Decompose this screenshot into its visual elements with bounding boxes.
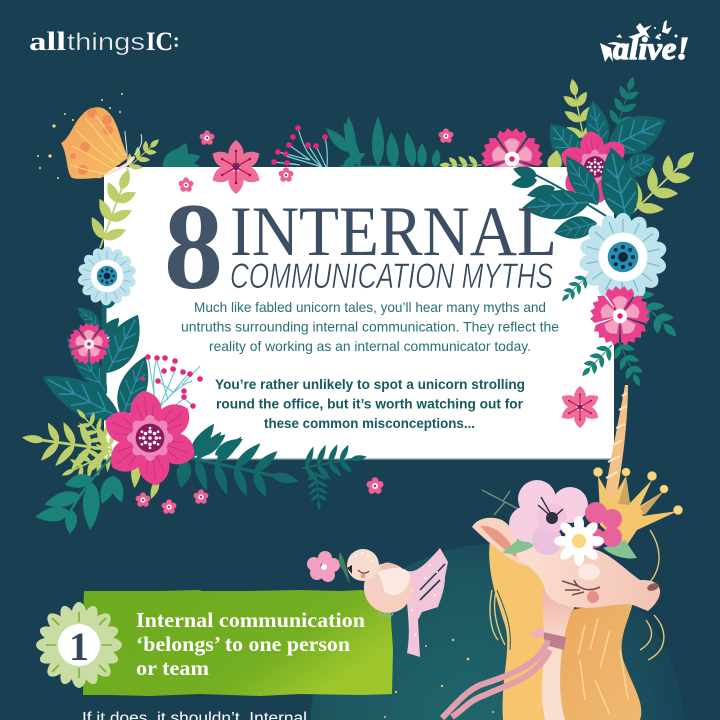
fern fronds bbox=[322, 116, 442, 170]
logo: alive: alive! bbox=[613, 30, 689, 66]
flower: carnation left bbox=[66, 323, 112, 367]
head flowers bbox=[509, 480, 622, 566]
pink wing ribbon bbox=[405, 548, 448, 657]
ear bbox=[472, 518, 526, 566]
title bbox=[164, 178, 557, 315]
unicorn bbox=[384, 385, 682, 720]
teal sprig left bbox=[34, 450, 127, 534]
intro text: Much like fabled unicorn tales, you’ll hear many myths and bbox=[194, 299, 546, 315]
subtitle: COMMUNICATION MYTHS bbox=[230, 257, 553, 296]
intro bold text: these common misconceptions... bbox=[264, 415, 475, 431]
hair left bbox=[489, 540, 570, 720]
banner heading: ‘belongs’ to one person bbox=[136, 632, 350, 656]
flower: big pink left bbox=[100, 389, 200, 487]
lime stem left over panel edge bbox=[80, 131, 167, 255]
logo: allthingsIC: things bbox=[67, 29, 145, 56]
leaves under flowers bbox=[502, 538, 637, 559]
dark fern lower bbox=[184, 424, 306, 511]
flower: blue right bbox=[578, 213, 668, 301]
berry branch left bbox=[141, 354, 203, 412]
crown bbox=[598, 476, 678, 548]
eye bbox=[562, 580, 600, 595]
badge: number 1: 1 bbox=[69, 624, 89, 669]
flower: carnation right bbox=[587, 286, 653, 349]
lime fern left bbox=[18, 399, 161, 500]
sparkles bbox=[384, 639, 494, 718]
collar bbox=[543, 632, 566, 650]
mane right bbox=[560, 598, 641, 720]
logo: alive bbox=[600, 20, 689, 66]
logo: allthingsIC: IC bbox=[146, 27, 173, 56]
word INTERNAL: INTERNAL bbox=[230, 193, 557, 271]
left cluster foliage bbox=[18, 276, 370, 534]
front leaves bbox=[520, 168, 606, 216]
intro bold text bbox=[215, 376, 525, 431]
lime sprig top bbox=[439, 154, 482, 176]
logo: allthingsIC: : bbox=[173, 30, 180, 52]
banner: myth 1 bbox=[83, 590, 393, 696]
oak leaf sprig bbox=[158, 140, 203, 173]
butterfly bbox=[37, 93, 142, 179]
banner heading: Internal communication bbox=[136, 608, 365, 632]
logo: allthingsIC: all bbox=[29, 27, 66, 56]
neck bbox=[542, 590, 590, 720]
small flowers on panel and around bbox=[136, 128, 453, 514]
head bbox=[516, 540, 660, 611]
intro text: reality of working as an internal communicator today. bbox=[209, 338, 531, 354]
banner heading bbox=[136, 608, 365, 680]
intro text: untruths surrounding internal communication. They reflect the bbox=[181, 318, 559, 334]
intro bold text: You’re rather unlikely to spot a unicorn strolling bbox=[215, 376, 525, 392]
carnation flower top bbox=[478, 128, 546, 193]
nose bbox=[646, 582, 660, 592]
lower teal sprigs bbox=[618, 278, 688, 348]
flower held by bird bbox=[307, 551, 340, 582]
top foliage behind panel bbox=[158, 72, 710, 232]
banner heading: or team bbox=[136, 656, 210, 680]
intro bold text: round the office, but it’s worth watching out for bbox=[216, 396, 524, 412]
number 8: 8 bbox=[164, 178, 223, 315]
berry branch top bbox=[271, 125, 328, 167]
intro text bbox=[181, 299, 559, 354]
flower: blue left bbox=[77, 246, 137, 306]
logo: allthingsIC bbox=[29, 27, 180, 56]
ribbon bbox=[442, 640, 550, 718]
bird bbox=[307, 549, 419, 620]
right cluster front bbox=[510, 130, 688, 392]
brush strokes bbox=[490, 530, 664, 660]
pink flower right bbox=[557, 130, 633, 204]
panel: intro bbox=[104, 167, 614, 459]
badge: number 1 bbox=[36, 602, 122, 688]
horn bbox=[604, 385, 628, 502]
star petal flower top bbox=[209, 140, 263, 194]
star petal flower right bbox=[559, 386, 601, 428]
right cluster back leaves bbox=[539, 72, 710, 232]
unicorn glow bbox=[310, 544, 684, 720]
sprig behind head bbox=[482, 490, 520, 515]
